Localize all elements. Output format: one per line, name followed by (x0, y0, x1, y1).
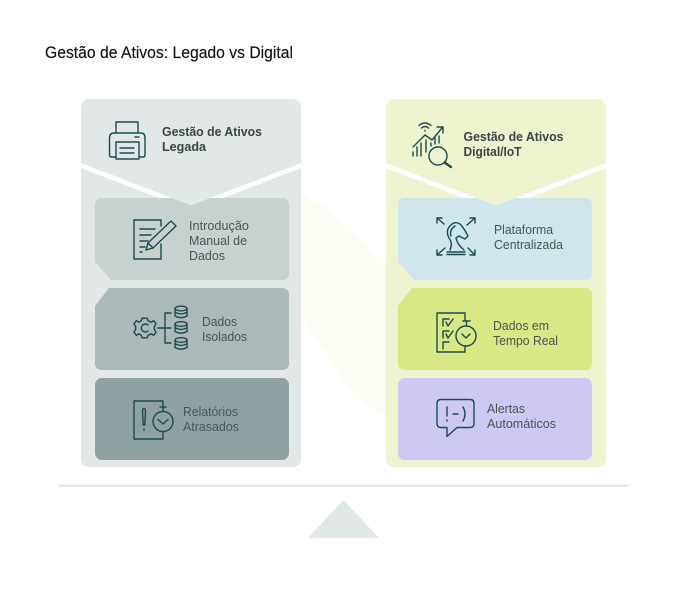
icon: chess knight with arrows (437, 218, 475, 255)
card: delayed reports (95, 378, 289, 460)
label: centralized platform (494, 222, 564, 252)
label: real-time data: Tempo Real (493, 333, 558, 348)
chevron divider: digital (386, 163, 606, 210)
label: manual data entry: Introdução (189, 218, 249, 233)
label: automatic alerts: Automáticos (487, 416, 556, 431)
card: manual data entry (95, 196, 289, 280)
label: manual data entry: Dados (189, 248, 225, 263)
label: manual data entry (189, 218, 249, 263)
label: manual data entry: Manual de (189, 233, 247, 248)
card: automatic alerts (398, 378, 592, 460)
label: centralized platform: Centralizada (494, 237, 564, 252)
background swoosh between panels (301, 191, 386, 417)
panel heading: legacy: Gestão de Ativos (162, 124, 262, 139)
icon: checklist and stopwatch (437, 313, 476, 352)
panel heading: digital: Gestão de Ativos (464, 129, 564, 144)
panel: legacy asset management (81, 99, 301, 467)
label: centralized platform: Plataforma (494, 222, 554, 237)
chevron divider: legacy (81, 163, 301, 210)
panel heading: legacy (162, 124, 262, 154)
card: centralized platform (398, 196, 592, 280)
panel heading: digital (464, 129, 564, 159)
label: automatic alerts: Alertas (487, 401, 525, 416)
label: delayed reports: Relatórios (183, 404, 238, 419)
panel heading: legacy: Legada (162, 139, 207, 154)
label: real-time data: Dados em (493, 318, 549, 333)
icon: alert speech bubble (437, 400, 474, 436)
label: siloed data: Dados (202, 314, 237, 329)
label: delayed reports (183, 404, 239, 434)
label: real-time data (493, 318, 558, 348)
card: siloed data (95, 288, 289, 370)
panel heading: digital: Digital/IoT (464, 144, 522, 159)
icon: printer (110, 122, 145, 159)
balance beam (58, 484, 628, 487)
icon: analytics, wifi and magnifier (413, 123, 451, 167)
panel: digital IoT asset management (386, 99, 606, 467)
label: automatic alerts (487, 401, 556, 431)
icon: gear and databases (134, 306, 187, 349)
balance fulcrum triangle (308, 500, 379, 538)
label: siloed data: Isolados (202, 329, 247, 344)
icon: alert and stopwatch (134, 401, 173, 439)
label: siloed data (202, 314, 247, 344)
title: Gestão de Ativos: Legado vs Digital (45, 44, 293, 62)
card: real-time data (398, 288, 592, 370)
icon: document and pencil (134, 220, 176, 259)
label: delayed reports: Atrasados (183, 419, 239, 434)
